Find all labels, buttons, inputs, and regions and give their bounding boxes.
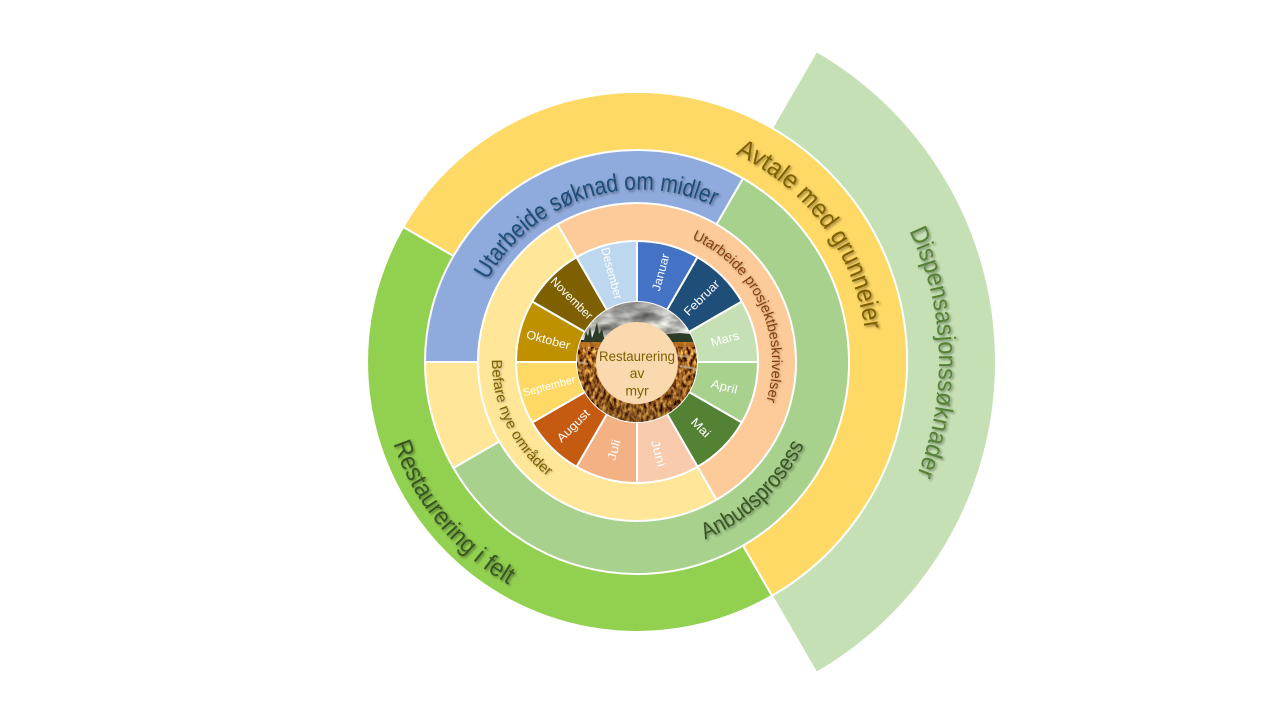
month: Mai: Mai — [688, 415, 713, 440]
panel: Dispensasjonssøknader outer band — [774, 52, 995, 672]
photo ring: bog landscape — [576, 301, 698, 423]
panel: Restaurering i felt band — [368, 226, 772, 631]
label: Utarbeide prosjektbeskrivelser: Utarbeide prosjektbeskrivelser — [694, 230, 784, 404]
month: Juni: Juni — [648, 438, 669, 468]
panel: Utarbeide prosjektbeskrivelser band — [556, 202, 797, 501]
center circle: Restaurering av myr: Restaurering — [599, 348, 675, 364]
panel: Avtale med grunneier band — [404, 92, 908, 596]
label: Dispensasjonssøknader: Dispensasjonssøknader — [910, 226, 959, 482]
month: Mai — [637, 362, 742, 467]
month: Mars — [637, 302, 758, 362]
month: Januar — [637, 241, 698, 362]
month: Mars: Mars — [709, 328, 741, 350]
panel: Utarbeide søknad om midler band — [424, 149, 744, 361]
month: Oktober — [516, 302, 637, 362]
center circle: Restaurering av myr — [596, 322, 678, 404]
month: April: April — [709, 376, 739, 397]
panel: Anbudsprosess band — [452, 177, 850, 575]
month: Februar: Februar — [681, 277, 723, 319]
month: November: November — [548, 274, 596, 322]
label: Avtale med grunneier: Avtale med grunneier — [736, 141, 882, 330]
label: Restaurering i felt: Restaurering i felt — [394, 439, 517, 587]
month: Desember: Desember — [598, 246, 625, 301]
center circle: Restaurering av myr: av — [630, 365, 644, 381]
month: Oktober: Oktober — [525, 327, 572, 353]
label: Anbudsprosess: Anbudsprosess — [704, 441, 806, 542]
month: Juni — [637, 362, 698, 483]
month: September — [516, 362, 637, 422]
month: April — [637, 362, 758, 422]
month: Januar: Januar — [649, 252, 672, 292]
month: Februar — [637, 257, 742, 362]
month: Juli — [576, 362, 637, 483]
month: August — [532, 362, 637, 467]
panel: unlabelled light yellow segment — [425, 362, 637, 468]
label: Utarbeide søknad om midler: Utarbeide søknad om midler — [474, 173, 722, 280]
month: August: August — [554, 406, 593, 445]
panel: Befare nye områder band — [477, 223, 718, 522]
month: Desember — [576, 241, 637, 362]
month: Juli: Juli — [605, 438, 623, 462]
month ring — [516, 241, 758, 483]
month: September: September — [522, 374, 577, 399]
label: Befare nye områder: Befare nye områder — [492, 360, 554, 476]
month: November — [532, 257, 637, 362]
center circle: Restaurering av myr: myr — [625, 382, 649, 398]
